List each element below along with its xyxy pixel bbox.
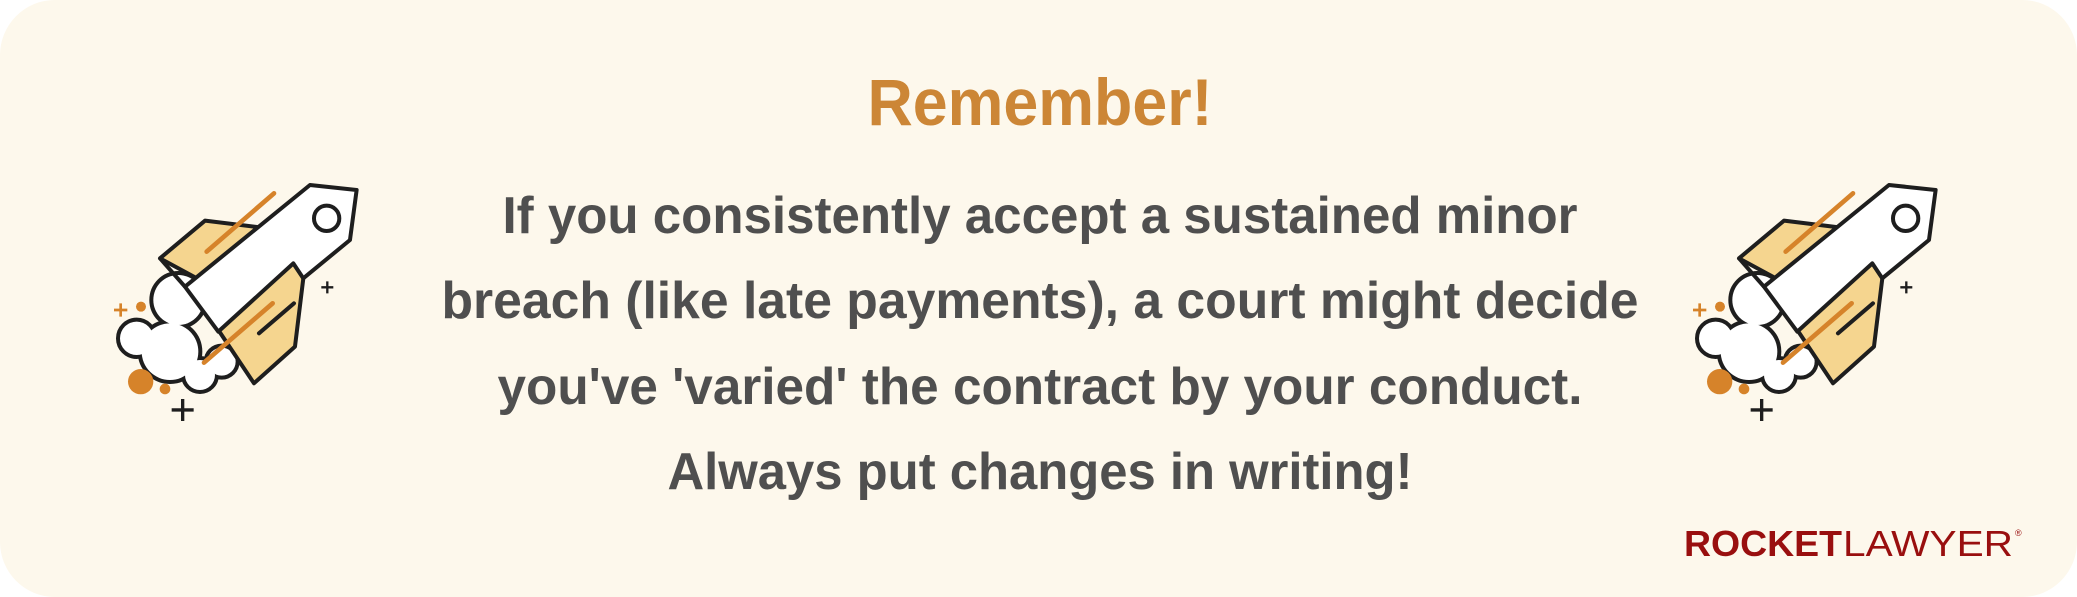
logo: ® xyxy=(2015,528,2022,538)
body text: Always put changes in writing! xyxy=(668,443,1412,501)
logo: ROCKET xyxy=(1684,523,1842,564)
body text: breach (like late payments), a court might decide xyxy=(442,272,1638,330)
logo xyxy=(1684,523,2022,564)
body text: If you consistently accept a sustained minor xyxy=(502,187,1578,245)
icon: right rocket xyxy=(1693,185,1936,421)
icon: left rocket xyxy=(114,185,357,421)
title: Remember! xyxy=(868,65,1212,139)
body text: you've 'varied' the contract by your conduct. xyxy=(498,358,1582,416)
logo: LAWYER xyxy=(1843,523,2013,564)
body text xyxy=(442,187,1638,501)
